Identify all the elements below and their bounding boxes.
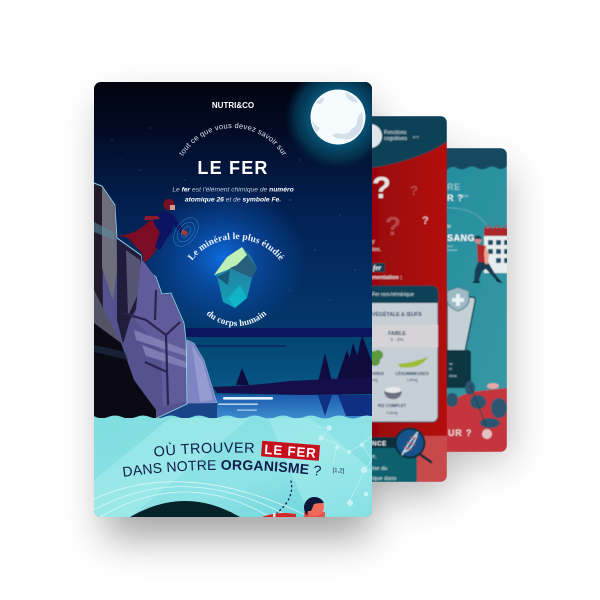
panel: non-heme iron: RIZ COMPLET [378,403,407,408]
card: front page [94,82,372,517]
band text: e, [372,454,377,460]
definition text: Le fer est l'élément chimique de numéro [172,186,294,194]
heading fragment [447,182,468,203]
lower sky [185,329,372,395]
black foreground [94,323,156,418]
upper block dark [94,184,103,322]
band text [372,454,396,482]
water edge [94,418,374,518]
panel: non-heme iron: FAIBLE [388,331,407,337]
functions label: [6-7] [413,135,419,139]
illustration: leaves [446,381,507,439]
citation: [1,2] [332,468,345,475]
question marks [372,176,429,236]
functions label: Fonctions [384,130,407,136]
question marks: ? [385,211,401,241]
panel: non-heme iron: VÉGÉTALE & ŒUFS [372,310,422,318]
question marks: ? [372,170,391,205]
teal header [372,116,447,169]
card: middle page (functions) [372,116,447,482]
lake [187,395,372,420]
SANG label: SANG [447,233,475,243]
icon: phone with shield [447,287,475,352]
panel: non-heme iron: 3 - 5% [390,337,404,342]
figure: tired person [472,236,503,283]
hero figure [117,199,188,263]
section title line 1: OÙ TROUVER [154,442,254,456]
fer label: fer [373,264,381,272]
title: LE FER [197,158,269,178]
fer label: mentation : [372,275,402,281]
icon: greens [372,350,384,366]
heading fragment: [3,4] [462,194,468,198]
icon: rice bowl [384,387,402,399]
iceberg [214,247,257,308]
panel: non-heme iron [372,284,440,424]
horizon band [186,328,372,337]
cliff [94,183,187,418]
dark info box: dosé. [449,374,458,378]
text fragment: y [372,239,375,245]
drop shadow [105,105,509,537]
bottom teal band [372,447,418,482]
functions label [372,123,420,149]
far shore [213,377,372,395]
arc label bottom: du corps humain [207,311,267,328]
dark circle [130,501,240,517]
second block [117,239,141,344]
dotted arc [447,208,488,228]
panel: non-heme iron: 1,6mg [406,377,418,382]
galaxy [169,213,203,251]
question marks: ? [410,183,418,198]
concentric rings [94,482,310,517]
cracks [123,290,180,405]
light rays [94,418,372,517]
heading fragment: R ? [447,193,463,203]
panel: non-heme iron: LÉGUMINEUSES [395,371,429,376]
red lower section [446,387,507,452]
fer label [372,263,402,281]
text fragment [372,239,381,253]
question marks: ? [422,215,429,227]
upper block grey [102,187,117,300]
SANG label [447,224,475,252]
question fragment: UR ? [448,428,472,438]
panel: non-heme iron: ARDS [372,371,384,376]
panel: non-heme iron: Fer non-héminique [372,292,414,298]
text fragment: ion. [372,247,381,253]
dark info box: ve [449,362,453,366]
dotted trajectory [277,481,292,513]
molecule network [318,426,372,506]
moon halo [288,82,372,166]
heading fragment: RE [447,182,461,192]
SANG label: pour [447,244,453,248]
band text: ique dans [372,476,396,482]
card: back page (anemia) [446,148,507,452]
water section [94,416,374,517]
moon [310,90,366,144]
band label [372,436,396,449]
arc label top: Le minéral le plus étudié [187,232,285,261]
swimmer [262,497,325,517]
icon: calendar [484,226,510,273]
band label: NCE [372,440,387,448]
SANG label: le [447,224,451,230]
icon: pea pod [398,357,428,368]
definition text: atomique 26 et de symbole Fe. [185,196,281,204]
functions label: cognitives [384,136,407,142]
blue glow [146,189,299,324]
stars [112,128,356,300]
dark header with waves [446,148,507,170]
trees [236,335,372,385]
night sky [94,82,372,329]
section title line 2: DANS NOTRE ORGANISME ? [123,460,321,477]
dark info box: nt [449,367,452,371]
small rock [157,340,217,418]
reflections [318,395,372,416]
dark info box [446,350,472,388]
purple facets [135,258,186,406]
moonlight on lake [218,397,273,411]
arc heading: tout ce que vous devez savoir sur [179,122,286,156]
panel: non-heme iron: 0,6mg [386,410,398,415]
highlight: le fer: LE FER [264,442,317,461]
definition text [172,186,294,204]
band text: ine du [372,466,387,472]
brand: NUTRI&CO [212,101,254,110]
icon: magnifier with DNA [396,428,431,462]
SANG label: l'animal. [447,248,458,252]
panel: non-heme iron: mg [372,377,378,382]
